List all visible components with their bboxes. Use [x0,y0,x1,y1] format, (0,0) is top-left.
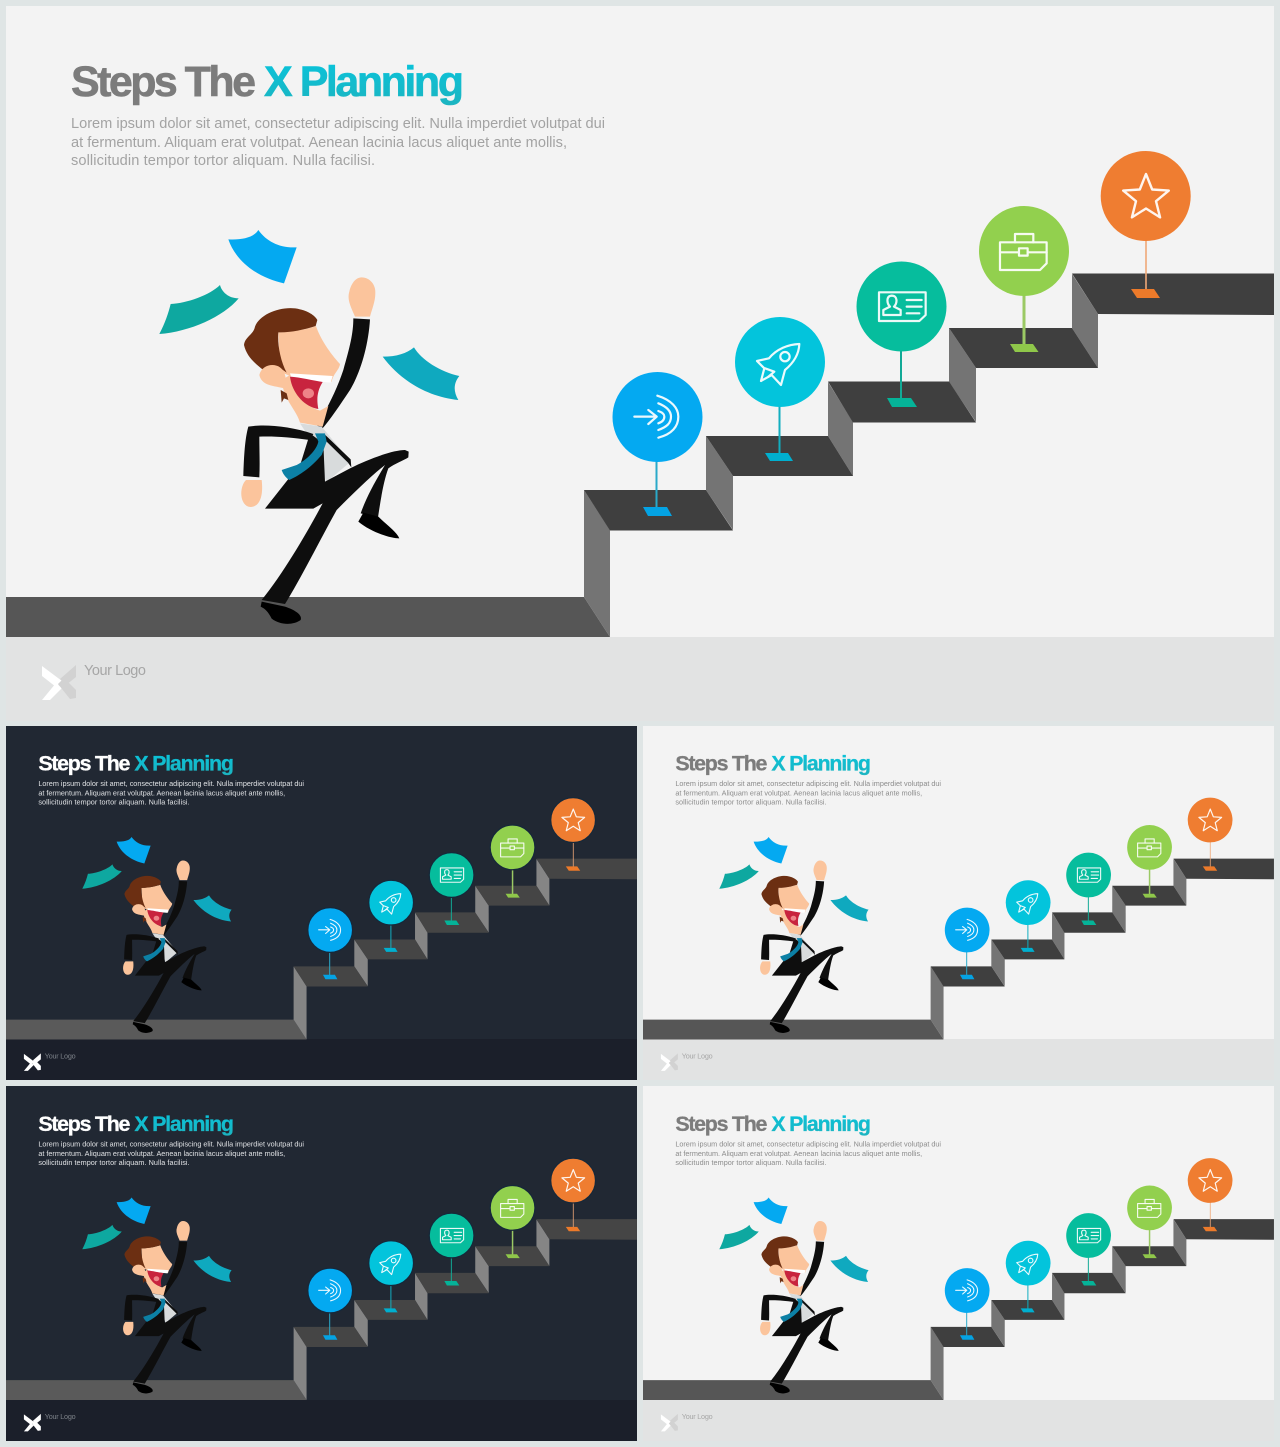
step marker: briefcase icon [1127,1186,1172,1258]
body text [675,779,941,807]
businessman with flying papers [719,837,869,1033]
title: X Planning [264,58,464,106]
title: Steps The [38,1112,131,1136]
slide background [6,1086,637,1441]
title: Steps The [675,1112,768,1136]
logo text: Your Logo [45,1412,76,1421]
body text: sollicitudin tempor tortor aliquam. Nulla facilisi. [71,153,375,169]
logo text: Your Logo [682,1412,713,1421]
step marker: signal icon [308,1268,353,1340]
logo mark [24,1414,41,1431]
staircase [6,274,1274,637]
step marker: briefcase icon [490,1186,535,1258]
step marker: briefcase icon [490,825,535,898]
step marker: briefcase icon [979,206,1069,352]
footer band [643,1039,1274,1080]
body text [71,116,605,169]
step marker: signal icon [308,908,353,979]
body text [675,1140,941,1167]
step marker: rocket icon [1006,880,1051,952]
step marker: star icon [551,1158,596,1231]
panel: small dark slide, top left [6,726,637,1080]
logo text: Your Logo [682,1051,713,1060]
step marker: ID card icon [1066,1213,1111,1286]
body text: at fermentum. Aliquam erat volutpat. Aenean lacinia lacus aliquet ante mollis, [675,1149,922,1158]
step marker: rocket icon [369,1241,414,1312]
staircase [643,1219,1274,1400]
slide content [6,1112,637,1431]
logo mark [661,1414,678,1431]
title: X Planning [134,1112,234,1136]
body text: Lorem ipsum dolor sit amet, consectetur adipiscing elit. Nulla imperdiet volutpat dui [71,116,605,132]
step marker: signal icon [945,1268,990,1340]
step marker: ID card icon [1066,853,1111,925]
step marker: star icon [551,798,596,871]
title: X Planning [771,1112,871,1136]
body text: sollicitudin tempor tortor aliquam. Nulla facilisi. [675,798,827,807]
staircase [6,859,637,1039]
footer band [6,1400,637,1441]
body text: Lorem ipsum dolor sit amet, consectetur adipiscing elit. Nulla imperdiet volutpat dui [675,779,941,788]
title: X Planning [134,751,234,775]
step marker: ID card icon [429,1213,474,1286]
staircase [6,1219,637,1400]
businessman with flying papers [82,837,232,1033]
slide background [643,726,1274,1080]
step marker: star icon [1101,151,1191,298]
logo mark [661,1053,678,1071]
step marker: star icon [1188,1158,1233,1231]
slide background [6,6,1274,637]
body text: Lorem ipsum dolor sit amet, consectetur adipiscing elit. Nulla imperdiet volutpat dui [38,1140,304,1149]
body text [38,1140,304,1167]
title: Steps The [71,58,256,106]
slide content [6,751,637,1071]
title: Steps The [675,751,768,775]
body text: sollicitudin tempor tortor aliquam. Nulla facilisi. [38,798,190,807]
step marker: signal icon [612,372,702,516]
businessman with flying papers [719,1197,869,1393]
slide background [6,726,637,1080]
body text: at fermentum. Aliquam erat volutpat. Aenean lacinia lacus aliquet ante mollis, [675,789,922,798]
panel: large light slide [6,6,1274,721]
logo text: Your Logo [84,663,146,679]
step marker: star icon [1188,798,1233,871]
title: X Planning [771,751,871,775]
businessman with flying papers [82,1197,232,1393]
body text: sollicitudin tempor tortor aliquam. Nulla facilisi. [38,1158,190,1167]
panel: small light slide, top right [643,726,1274,1080]
step marker: signal icon [945,908,990,979]
body text [38,779,304,807]
slide content [643,1112,1274,1431]
logo text: Your Logo [45,1051,76,1060]
staircase [643,859,1274,1039]
panel: small dark slide, bottom left [6,1086,637,1441]
step marker: briefcase icon [1127,825,1172,898]
body text: sollicitudin tempor tortor aliquam. Nulla facilisi. [675,1158,827,1167]
step marker: rocket icon [369,880,414,952]
step marker: ID card icon [856,262,946,407]
businessman with flying papers [159,230,459,624]
footer band [643,1400,1274,1441]
step marker: rocket icon [1006,1241,1051,1312]
step marker: ID card icon [429,853,474,925]
body text: at fermentum. Aliquam erat volutpat. Aenean lacinia lacus aliquet ante mollis, [71,135,567,151]
logo mark [42,665,76,700]
body text: at fermentum. Aliquam erat volutpat. Aenean lacinia lacus aliquet ante mollis, [38,1149,285,1158]
slide background [643,1086,1274,1441]
slide content [643,751,1274,1071]
title: Steps The [38,751,131,775]
footer band [6,1039,637,1080]
body text: Lorem ipsum dolor sit amet, consectetur adipiscing elit. Nulla imperdiet volutpat dui [675,1140,941,1149]
logo mark [24,1053,41,1071]
footer band [6,637,1274,721]
body text: Lorem ipsum dolor sit amet, consectetur adipiscing elit. Nulla imperdiet volutpat dui [38,779,304,788]
step marker: rocket icon [735,317,825,461]
body text: at fermentum. Aliquam erat volutpat. Aenean lacinia lacus aliquet ante mollis, [38,789,285,798]
panel: small light slide, bottom right [643,1086,1274,1441]
